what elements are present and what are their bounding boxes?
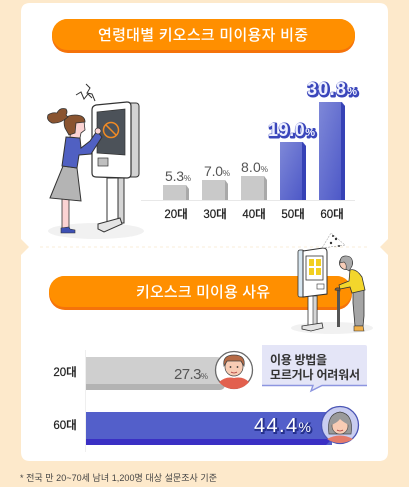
panel: age group share — [48, 19, 358, 239]
bar: 50s: 50대 — [281, 207, 305, 221]
panel: reasons for non-use — [49, 233, 373, 452]
row: 60s — [53, 412, 332, 445]
bar: 50s: 19.0% — [268, 120, 315, 140]
illustration: woman frustrated at kiosk — [48, 84, 144, 239]
bar chart: reasons by age group — [53, 350, 358, 452]
bar chart: share by age group — [163, 79, 358, 221]
row: 60s: 44.4% — [255, 416, 312, 438]
row: 20s — [53, 357, 225, 390]
bar: 30s: 7.0% — [204, 163, 230, 179]
bar: 60s: 60대 — [320, 207, 344, 221]
bar: 40s — [241, 159, 268, 221]
heading: age group share: 연령대별 키오스크 미이용자 비중 — [98, 27, 308, 44]
bar: 60s — [307, 79, 358, 221]
bar: 60s: 30.8% — [308, 80, 358, 100]
icon: young man avatar — [216, 352, 252, 389]
callout: reason text: 이용 방법을 — [270, 353, 327, 367]
heading: age group share — [52, 19, 355, 53]
row: 20s: 20대 — [53, 365, 77, 379]
row: 60s: 44.4% — [254, 415, 311, 437]
bar: 40s: 40대 — [242, 207, 266, 221]
bar: 30s: 30대 — [203, 207, 227, 221]
bar: 50s: 19.0% — [269, 121, 316, 141]
bar: 50s — [268, 120, 316, 221]
footnote: * 전국 만 20~70세 남녀 1,200명 대상 설문조사 기준 — [20, 473, 217, 483]
bar: 20s: 20대 — [164, 207, 188, 221]
bar: 20s: 5.3% — [165, 168, 191, 184]
illustration: senior at kiosk — [291, 233, 373, 334]
heading: reasons — [49, 276, 352, 310]
bar: 60s: 30.8% — [307, 79, 357, 99]
callout: reason text: 모르거나 어려워서 — [270, 367, 360, 382]
bar: 20s — [163, 168, 191, 221]
bar: 30s — [202, 163, 230, 221]
row: 20s: 27.3% — [174, 366, 208, 383]
baseline — [141, 200, 355, 202]
callout: reason text — [262, 345, 367, 391]
row: 60s: 60대 — [53, 418, 77, 432]
icon: senior woman avatar — [322, 406, 358, 444]
heading: reasons: 키오스크 미이용 사유 — [136, 284, 270, 301]
bar: 40s: 8.0% — [241, 159, 268, 175]
